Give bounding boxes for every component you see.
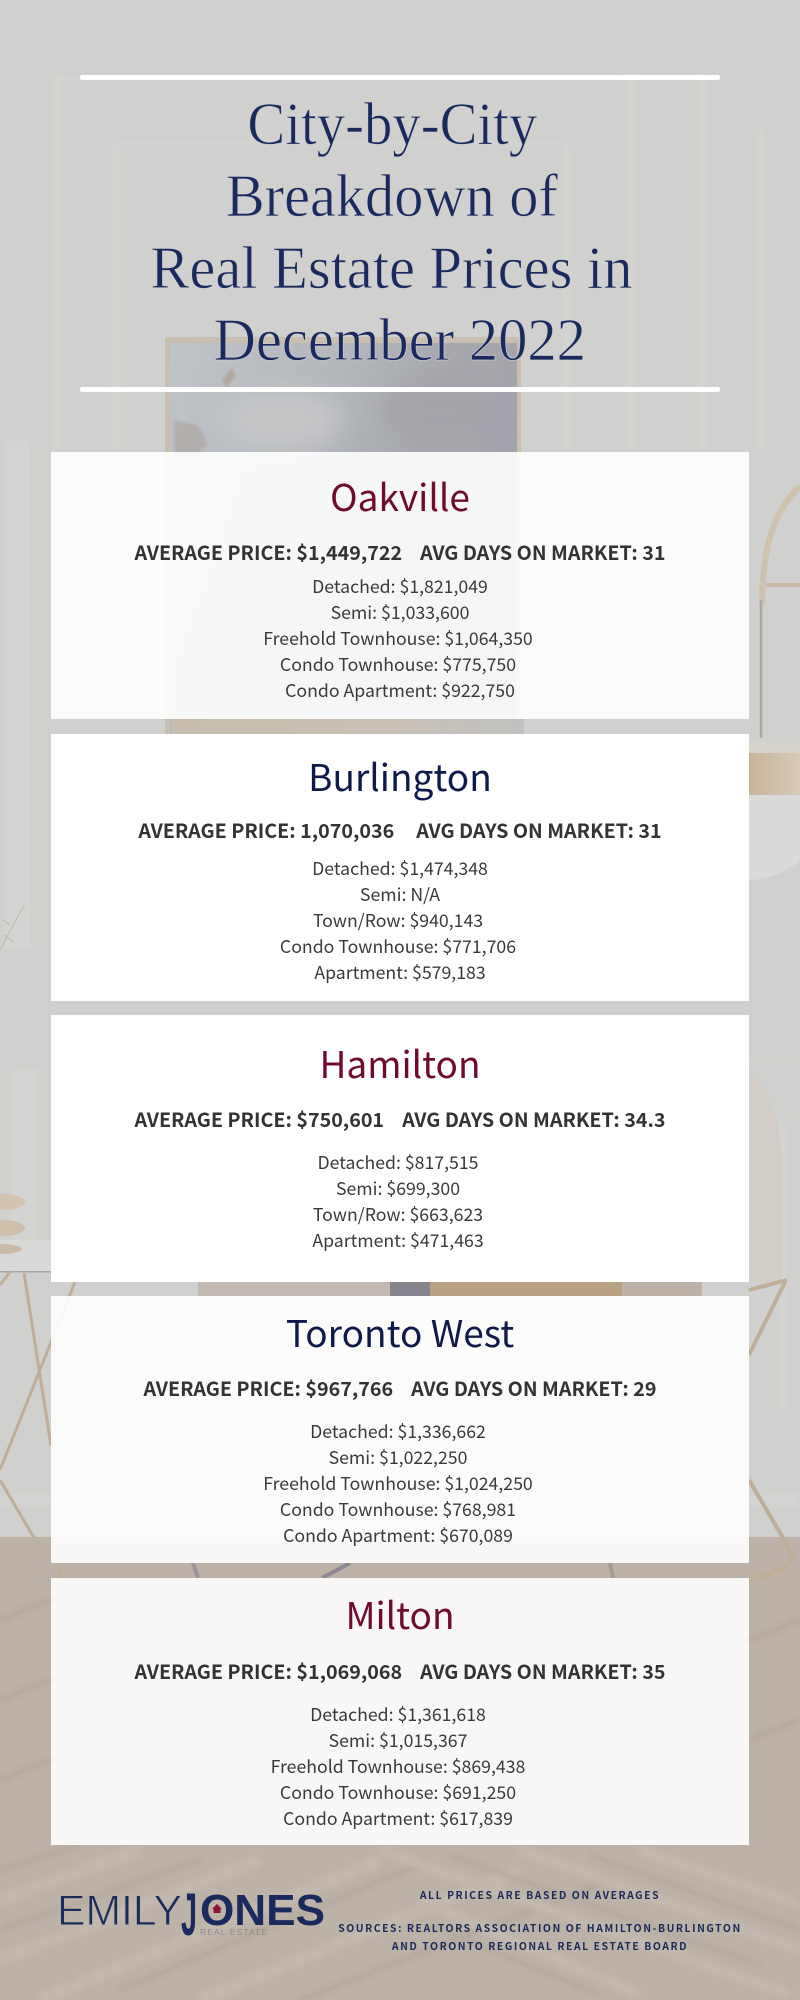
table with stones: [0, 905, 75, 1575]
logo: Emily Jones Real Estate: [57, 1885, 325, 1945]
footnote: sources: [338, 1920, 742, 1953]
price list: [263, 1418, 533, 1548]
stats: AVERAGE PRICE: $967,766 AVG DAYS ON MARKET: 29: [144, 1373, 656, 1402]
stats: AVERAGE PRICE: $1,449,722 AVG DAYS ON MARKET: 31: [135, 537, 665, 566]
title: City-by-City: [247, 91, 537, 157]
price list: Town/Row: $663,623: [313, 1201, 483, 1227]
logo: Emily Jones Real Estate: REAL ESTATE: [200, 1927, 267, 1937]
heading: Milton: [345, 1586, 455, 1640]
price list: Condo Apartment: $670,089: [283, 1522, 513, 1548]
rule: bottom: [80, 387, 720, 392]
price list: Semi: $1,022,250: [329, 1444, 467, 1470]
armchair: [58, 1070, 793, 1582]
price list: Apartment: $579,183: [314, 959, 486, 985]
title: Breakdown of: [226, 163, 558, 229]
footnote: averages: ALL PRICES ARE BASED ON AVERAGES: [420, 1887, 660, 1902]
pendant lamp: [749, 486, 800, 880]
price list: Semi: $1,033,600: [331, 599, 469, 625]
price list: [280, 855, 516, 985]
heading: Toronto West: [286, 1304, 514, 1358]
price list: Condo Apartment: $617,839: [283, 1805, 513, 1831]
price list: Condo Townhouse: $775,750: [280, 651, 516, 677]
price list: Semi: $699,300: [336, 1175, 460, 1201]
title: Real Estate Prices in: [150, 235, 632, 301]
price list: Detached: $817,515: [317, 1149, 478, 1175]
price list: [263, 573, 533, 703]
price list: Freehold Townhouse: $1,024,250: [263, 1470, 533, 1496]
price list: Condo Townhouse: $771,706: [280, 933, 516, 959]
heading: Hamilton: [319, 1035, 481, 1089]
stats: AVERAGE PRICE: 1,070,036 AVG DAYS ON MARKET: 31: [138, 815, 662, 844]
price list: Condo Townhouse: $691,250: [280, 1779, 516, 1805]
panel: Toronto West: [51, 1296, 749, 1563]
price list: Detached: $1,361,618: [310, 1701, 486, 1727]
price list: Semi: N/A: [360, 881, 440, 907]
title: December 2022: [214, 307, 586, 373]
price list: Semi: $1,015,367: [329, 1727, 467, 1753]
title: [150, 91, 632, 373]
price list: Freehold Townhouse: $1,064,350: [263, 625, 533, 651]
panel: Oakville: [51, 452, 749, 719]
panel: Milton: [51, 1578, 749, 1845]
floor: [0, 1537, 800, 2000]
painting: [165, 337, 524, 737]
price list: [312, 1149, 484, 1253]
heading: Oakville: [330, 468, 470, 522]
stats: AVERAGE PRICE: $750,601 AVG DAYS ON MARKET: 34.3: [135, 1104, 665, 1133]
price list: Condo Townhouse: $768,981: [280, 1496, 516, 1522]
price list: [271, 1701, 525, 1831]
logo: Emily Jones Real Estate: EMILY: [57, 1887, 182, 1935]
heading: Burlington: [308, 748, 492, 802]
price list: Apartment: $471,463: [312, 1227, 484, 1253]
footnote: sources: AND TORONTO REGIONAL REAL ESTATE BOARD: [392, 1938, 688, 1953]
panel: Burlington: [51, 734, 749, 1001]
rule: top: [80, 75, 720, 80]
footnote: sources: SOURCES: REALTORS ASSOCIATION OF HAMILTON-BURLINGTON: [338, 1920, 742, 1935]
price list: Condo Apartment: $922,750: [285, 677, 515, 703]
price list: Detached: $1,336,662: [310, 1418, 486, 1444]
logo: Emily Jones Real Estate: ONES: [200, 1886, 325, 1935]
panel: Hamilton: [51, 1015, 749, 1282]
stats: AVERAGE PRICE: $1,069,068 AVG DAYS ON MARKET: 35: [135, 1656, 665, 1685]
price list: Detached: $1,821,049: [312, 573, 488, 599]
price list: Detached: $1,474,348: [312, 855, 488, 881]
price list: Freehold Townhouse: $869,438: [271, 1753, 525, 1779]
price list: Town/Row: $940,143: [313, 907, 483, 933]
